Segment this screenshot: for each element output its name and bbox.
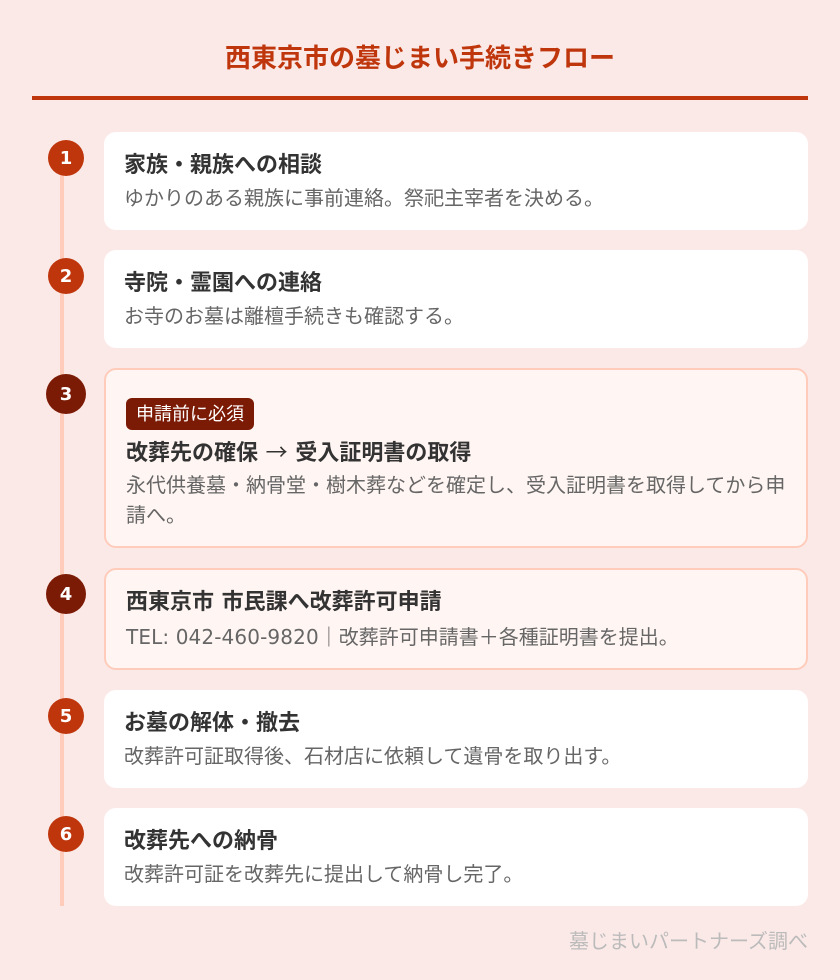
step 1 number xyxy=(48,140,84,176)
title: 西東京市の墓じまい手続きフロー xyxy=(225,44,615,74)
timeline line xyxy=(60,150,64,906)
step 6 text: 改葬許可証を改葬先に提出して納骨し完了。 xyxy=(124,862,523,886)
step 5 heading: お墓の解体・撤去 xyxy=(124,711,300,736)
step 5 number xyxy=(48,698,84,734)
step 2 card xyxy=(104,250,808,348)
step 4 number: 4 xyxy=(60,584,72,605)
step 3 number xyxy=(46,374,86,414)
step 4 number xyxy=(46,574,86,614)
required badge xyxy=(126,398,254,430)
source note: 墓じまいパートナーズ調べ xyxy=(569,929,808,953)
step 1 number: 1 xyxy=(60,148,72,169)
step 2 number xyxy=(48,258,84,294)
step 6 heading: 改葬先への納骨 xyxy=(124,829,278,854)
step 5 number: 5 xyxy=(60,706,72,727)
step 1 card xyxy=(104,132,808,230)
step 2 heading: 寺院・霊園への連絡 xyxy=(124,271,322,296)
step 1 text: ゆかりのある親族に事前連絡。祭祀主宰者を決める。 xyxy=(124,186,604,210)
step 1 heading: 家族・親族への相談 xyxy=(124,153,322,178)
step 6 number: 6 xyxy=(60,824,72,845)
step 3 text: 永代供養墓・納骨堂・樹木葬などを確定し、受入証明書を取得してから申請へ。 xyxy=(126,473,785,527)
step 6 card xyxy=(104,808,808,906)
step 5 card xyxy=(104,690,808,788)
step 4 text: TEL: 042-460-9820｜改葬許可申請書＋各種証明書を提出。 xyxy=(126,625,679,649)
step 4 card xyxy=(104,568,808,670)
step 6 number xyxy=(48,816,84,852)
required badge: 申請前に必須 xyxy=(136,404,244,425)
step 4 heading: 西東京市 市民課へ改葬許可申請 xyxy=(126,590,442,615)
step 2 text: お寺のお墓は離檀手続きも確認する。 xyxy=(124,304,464,328)
step 3 card xyxy=(104,368,808,548)
step 3 number: 3 xyxy=(60,384,72,405)
step 3 heading: 改葬先の確保 → 受入証明書の取得 xyxy=(126,435,471,467)
step 2 number: 2 xyxy=(60,266,72,287)
step 5 text: 改葬許可証取得後、石材店に依頼して遺骨を取り出す。 xyxy=(124,744,621,768)
